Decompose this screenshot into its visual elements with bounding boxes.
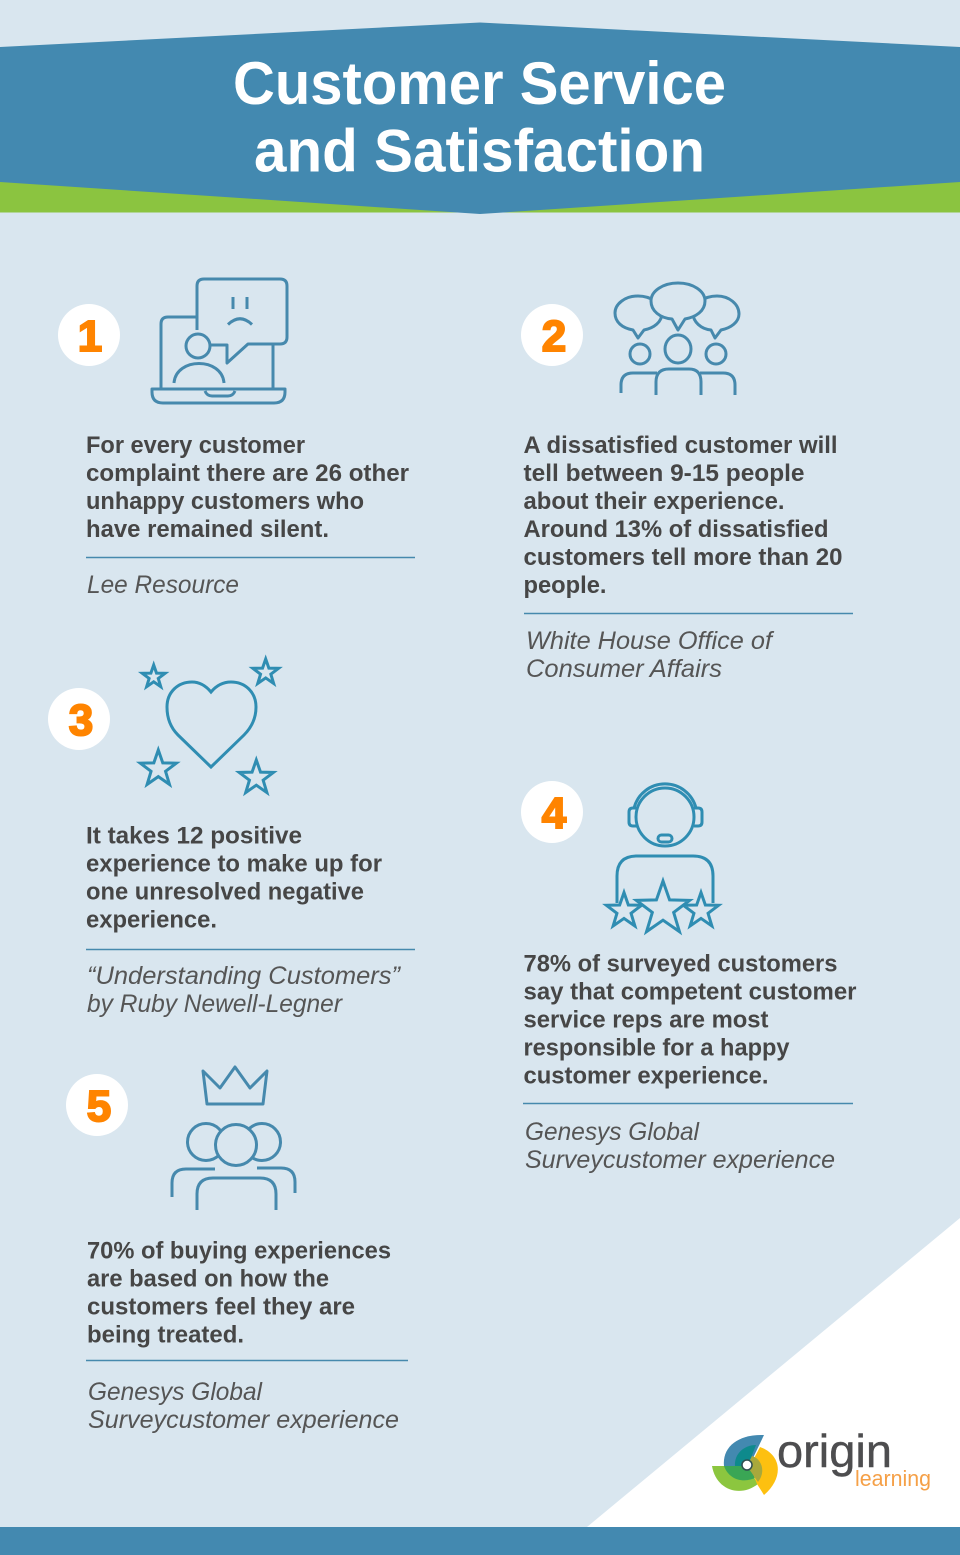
footer bar	[0, 1527, 960, 1555]
source: stat 3	[87, 962, 402, 1018]
text: stat 2: Around 13% of dissatisfied	[524, 516, 828, 543]
text: stat 3: experience.	[86, 906, 217, 934]
text: stat 2: tell between 9-15 people	[524, 460, 804, 487]
logo wordmark: learning	[855, 1466, 931, 1491]
number badge 5	[66, 1074, 128, 1136]
text: stat 5: customers feel they are	[87, 1294, 355, 1320]
source: stat 3: “Understanding Customers”	[87, 962, 402, 990]
text: stat 2: customers tell more than 20	[524, 544, 842, 571]
text: stat 5: 70% of buying experiences	[87, 1238, 391, 1264]
text: stat 3: It takes 12 positive	[86, 822, 302, 850]
panel: stat 2	[521, 283, 853, 683]
source: stat 4: Surveycustomer experience	[525, 1146, 835, 1174]
text: stat 4: responsible for a happy	[524, 1034, 790, 1062]
source: stat 5: Genesys Global	[88, 1378, 263, 1406]
panel: stat 4	[521, 781, 856, 1174]
source: stat 5	[88, 1378, 399, 1434]
number badge 1	[58, 304, 120, 366]
source: stat 4: Genesys Global	[525, 1118, 700, 1146]
text: stat 1: unhappy customers who	[86, 488, 364, 515]
title	[233, 50, 726, 184]
number badge 3	[48, 688, 110, 750]
icon: group of people with speech bubbles	[615, 283, 739, 395]
text: stat 1: complaint there are 26 other	[86, 460, 409, 487]
header banner	[0, 22, 960, 214]
logo: origin learning	[712, 1425, 931, 1495]
source: stat 1: Lee Resource	[87, 571, 239, 599]
text: stat 2: about their experience.	[524, 488, 784, 515]
text: stat 5	[87, 1238, 391, 1348]
text: stat 1: have remained silent.	[86, 516, 329, 543]
number badge 2	[521, 304, 583, 366]
text: stat 3: one unresolved negative	[86, 878, 364, 906]
panel: stat 3	[48, 659, 415, 1018]
text: stat 2: A dissatisfied customer will	[524, 432, 838, 459]
icon: heart with stars	[140, 659, 279, 793]
source: stat 2	[526, 627, 775, 683]
icon: group of people with crown	[172, 1067, 295, 1210]
text: stat 4: say that competent customer	[524, 978, 856, 1006]
source: stat 2: Consumer Affairs	[526, 655, 722, 683]
source: stat 4	[525, 1118, 835, 1174]
source: stat 2: White House Office of	[526, 627, 775, 655]
number badge 4	[521, 781, 583, 843]
panel: stat 5	[66, 1067, 408, 1434]
text: stat 3	[86, 822, 382, 934]
text: stat 4: 78% of surveyed customers	[524, 950, 838, 978]
text: stat 4: customer experience.	[524, 1062, 768, 1090]
white corner triangle	[587, 1218, 960, 1527]
text: stat 3: experience to make up for	[86, 850, 382, 878]
icon: laptop with unhappy speech bubble	[152, 279, 287, 403]
number badge 4: 4	[542, 789, 567, 838]
title: and Satisfaction	[254, 118, 705, 184]
text: stat 2	[524, 432, 842, 599]
text: stat 1: For every customer	[86, 432, 305, 459]
text: stat 4: service reps are most	[524, 1006, 768, 1034]
text: stat 5: are based on how the	[87, 1266, 329, 1292]
icon: support agent with headset and stars	[606, 784, 719, 932]
text: stat 2: people.	[524, 572, 606, 599]
text: stat 4	[524, 950, 856, 1090]
number badge 5: 5	[87, 1082, 111, 1131]
title: Customer Service	[233, 50, 726, 117]
panel: stat 1	[58, 279, 415, 599]
text: stat 1	[86, 432, 409, 543]
logo wordmark	[777, 1425, 931, 1491]
logo wordmark: origin	[777, 1425, 892, 1477]
number badge 2: 2	[542, 312, 566, 361]
source: stat 3: by Ruby Newell-Legner	[87, 990, 344, 1018]
text: stat 5: being treated.	[87, 1322, 244, 1348]
number badge 3: 3	[69, 696, 93, 745]
number badge 1: 1	[78, 312, 102, 361]
icon: logo swirl	[712, 1435, 778, 1495]
source: stat 5: Surveycustomer experience	[88, 1406, 399, 1434]
